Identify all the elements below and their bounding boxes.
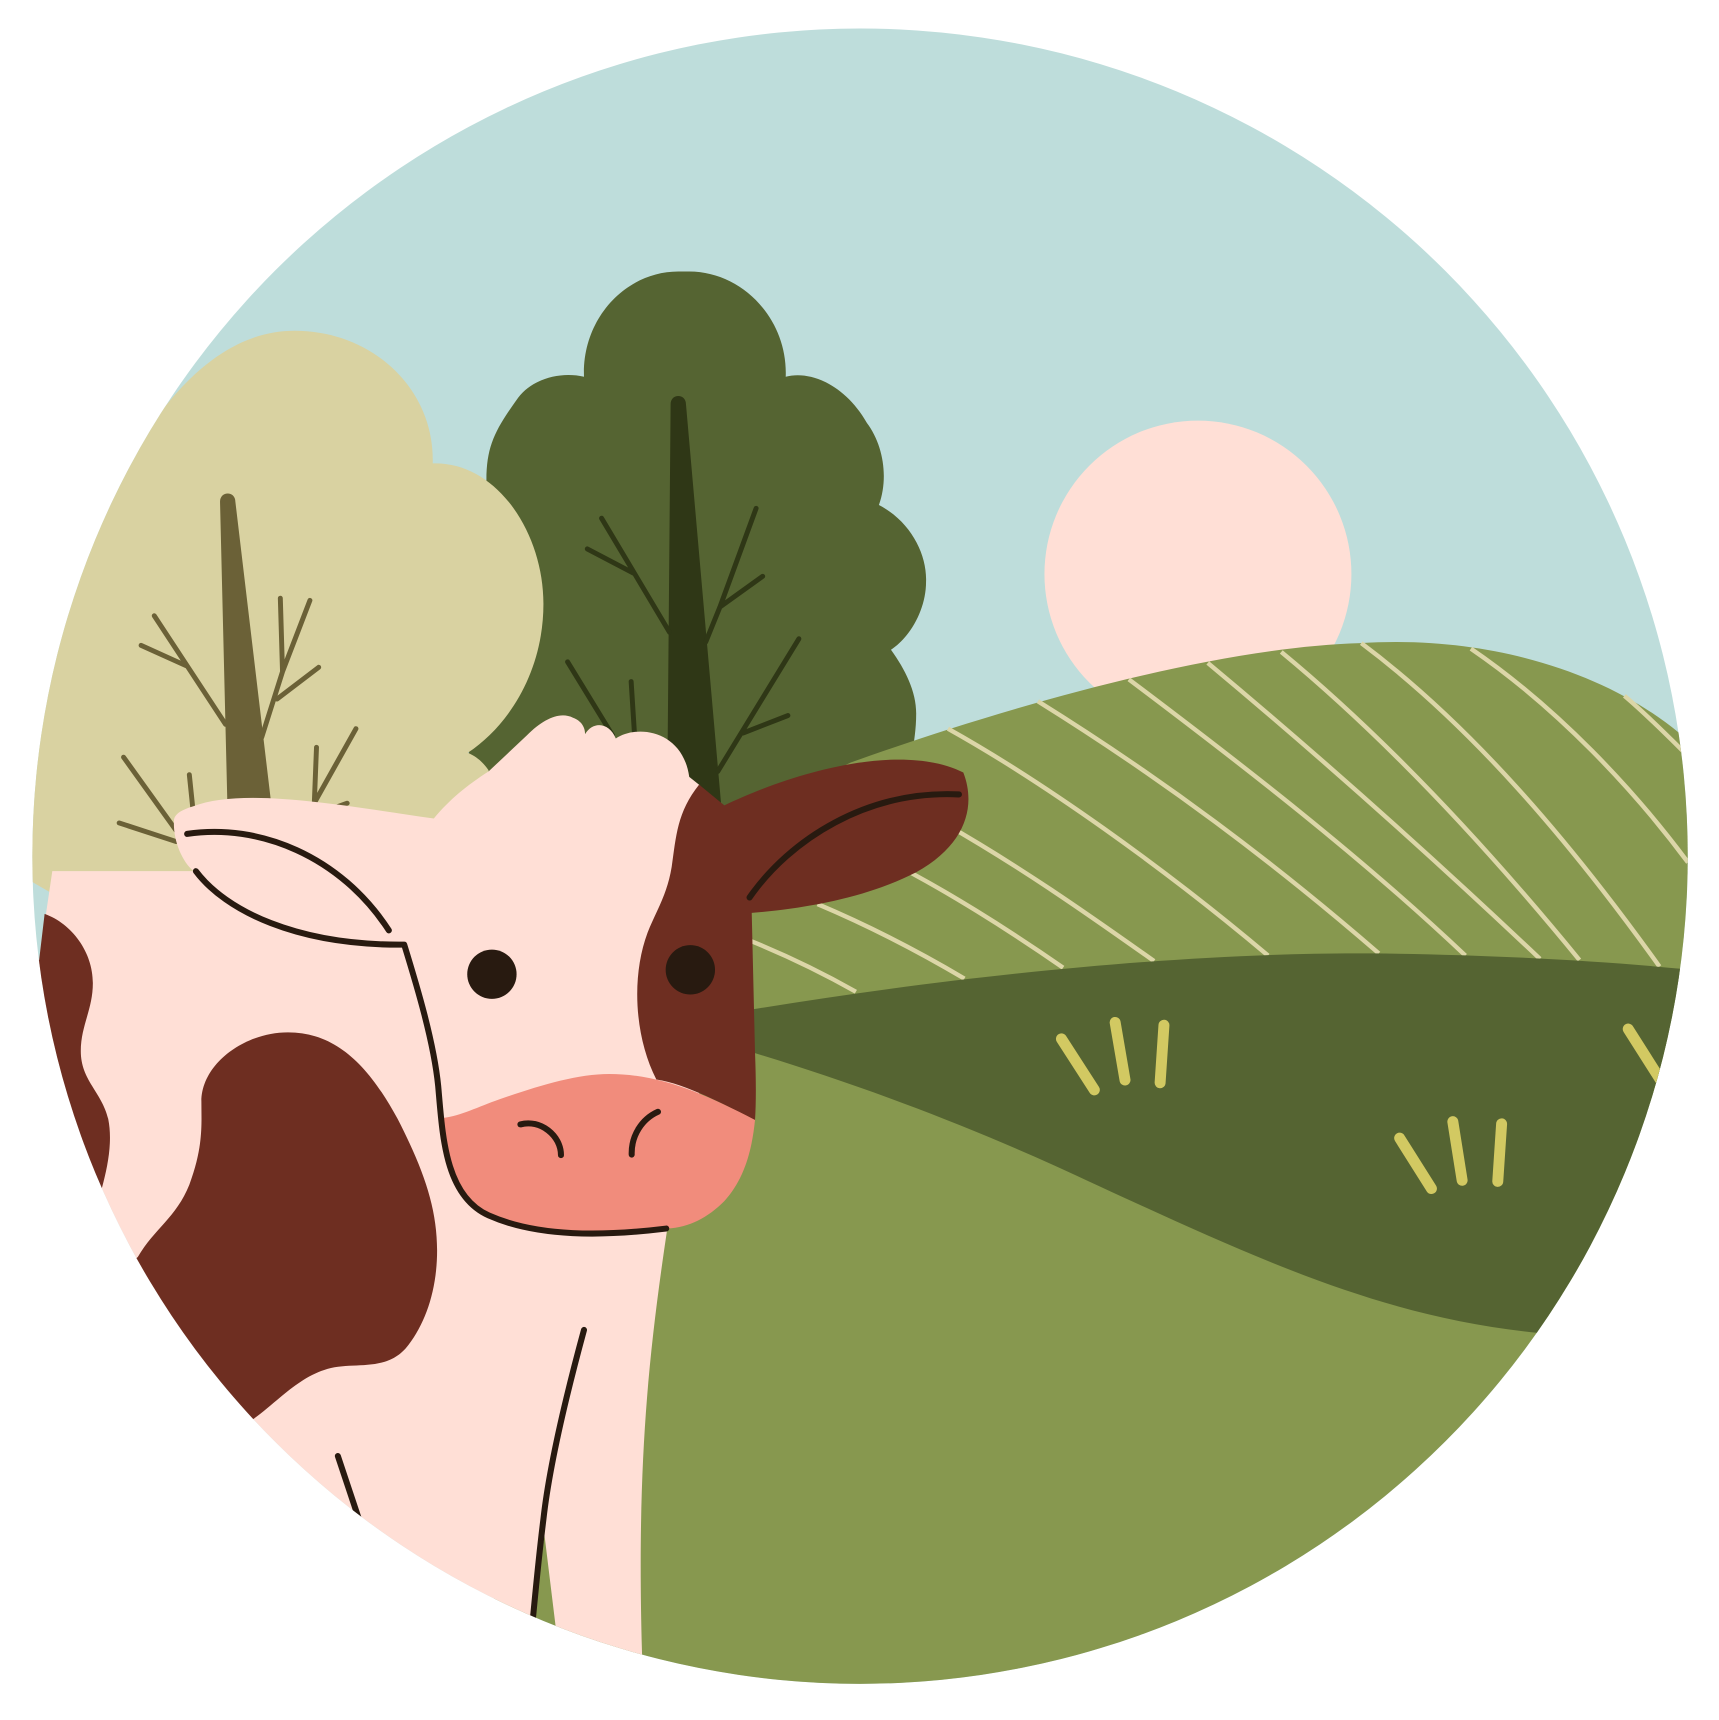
back hill <box>702 642 1719 1097</box>
muzzle <box>444 1074 755 1233</box>
eyes <box>467 945 715 999</box>
dark green hill band <box>754 953 1680 1333</box>
pale tan tree <box>1 331 543 902</box>
cow <box>38 715 968 1654</box>
hill field stripes <box>746 643 1688 992</box>
grass tufts <box>1061 1022 1661 1189</box>
body spot left <box>38 914 110 1188</box>
sun <box>1044 420 1352 688</box>
dark green tree <box>468 272 926 834</box>
brown head patch and right ear <box>637 760 968 1120</box>
front green field <box>494 1042 1719 1720</box>
body spot large <box>136 1032 438 1419</box>
cow outlines <box>187 794 959 1634</box>
cow body and head <box>39 715 700 1654</box>
